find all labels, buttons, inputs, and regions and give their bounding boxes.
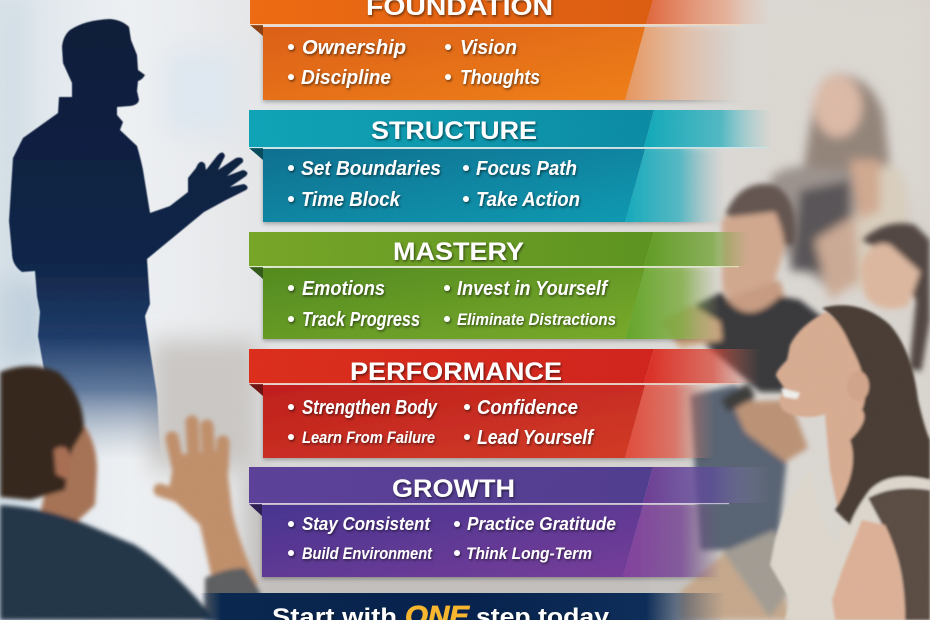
list: Growth items: Think Long-Term xyxy=(466,544,592,563)
call to action banner xyxy=(200,593,725,620)
list: Structure items: Focus Path xyxy=(476,158,577,180)
list: Foundation items: Vision xyxy=(460,37,517,59)
audience member: man in foreground with raised hand xyxy=(0,366,260,620)
list: Growth items: Build Environment xyxy=(302,544,433,563)
list: Performance items: Lead Yourself xyxy=(477,427,595,449)
list: Performance items: Strengthen Body xyxy=(302,397,438,419)
audience: crowd photo on the right xyxy=(650,0,930,620)
heading: Mastery: MASTERY xyxy=(393,238,524,266)
panel: Structure xyxy=(249,110,772,222)
panel: Foundation xyxy=(250,0,770,100)
list: Growth items: Practice Gratitude xyxy=(467,514,616,534)
list: Mastery items: Emotions xyxy=(302,278,385,300)
heading: Performance: PERFORMANCE xyxy=(350,358,562,386)
list: Mastery items: Invest in Yourself xyxy=(457,278,609,300)
list: Structure items: Set Boundaries xyxy=(301,158,441,180)
list: Growth items: Stay Consistent xyxy=(302,514,431,534)
list: Foundation items: Thoughts xyxy=(460,67,540,89)
heading: Growth: GROWTH xyxy=(392,475,515,503)
list: Foundation items: Ownership xyxy=(302,37,406,59)
list: Foundation items xyxy=(288,37,540,89)
list: Growth items xyxy=(288,514,616,563)
list: Performance items: Learn From Failure xyxy=(302,428,435,447)
panel: Growth xyxy=(249,467,770,577)
list: Performance items: Confidence xyxy=(477,397,578,419)
list: Mastery items: Track Progress xyxy=(302,309,420,331)
panel: Performance xyxy=(249,349,760,458)
list: Mastery items xyxy=(288,278,616,331)
list: Structure items: Take Action xyxy=(476,189,580,211)
list: Foundation items: Discipline xyxy=(301,67,391,89)
speaker silhouette xyxy=(9,19,248,480)
list: Mastery items: Eliminate Distractions xyxy=(457,310,616,329)
panel: Mastery xyxy=(249,232,750,339)
list: Performance items xyxy=(288,397,595,449)
heading: Structure: STRUCTURE xyxy=(371,117,537,145)
list: Structure items xyxy=(288,158,580,211)
list: Structure items: Time Block xyxy=(301,189,401,211)
